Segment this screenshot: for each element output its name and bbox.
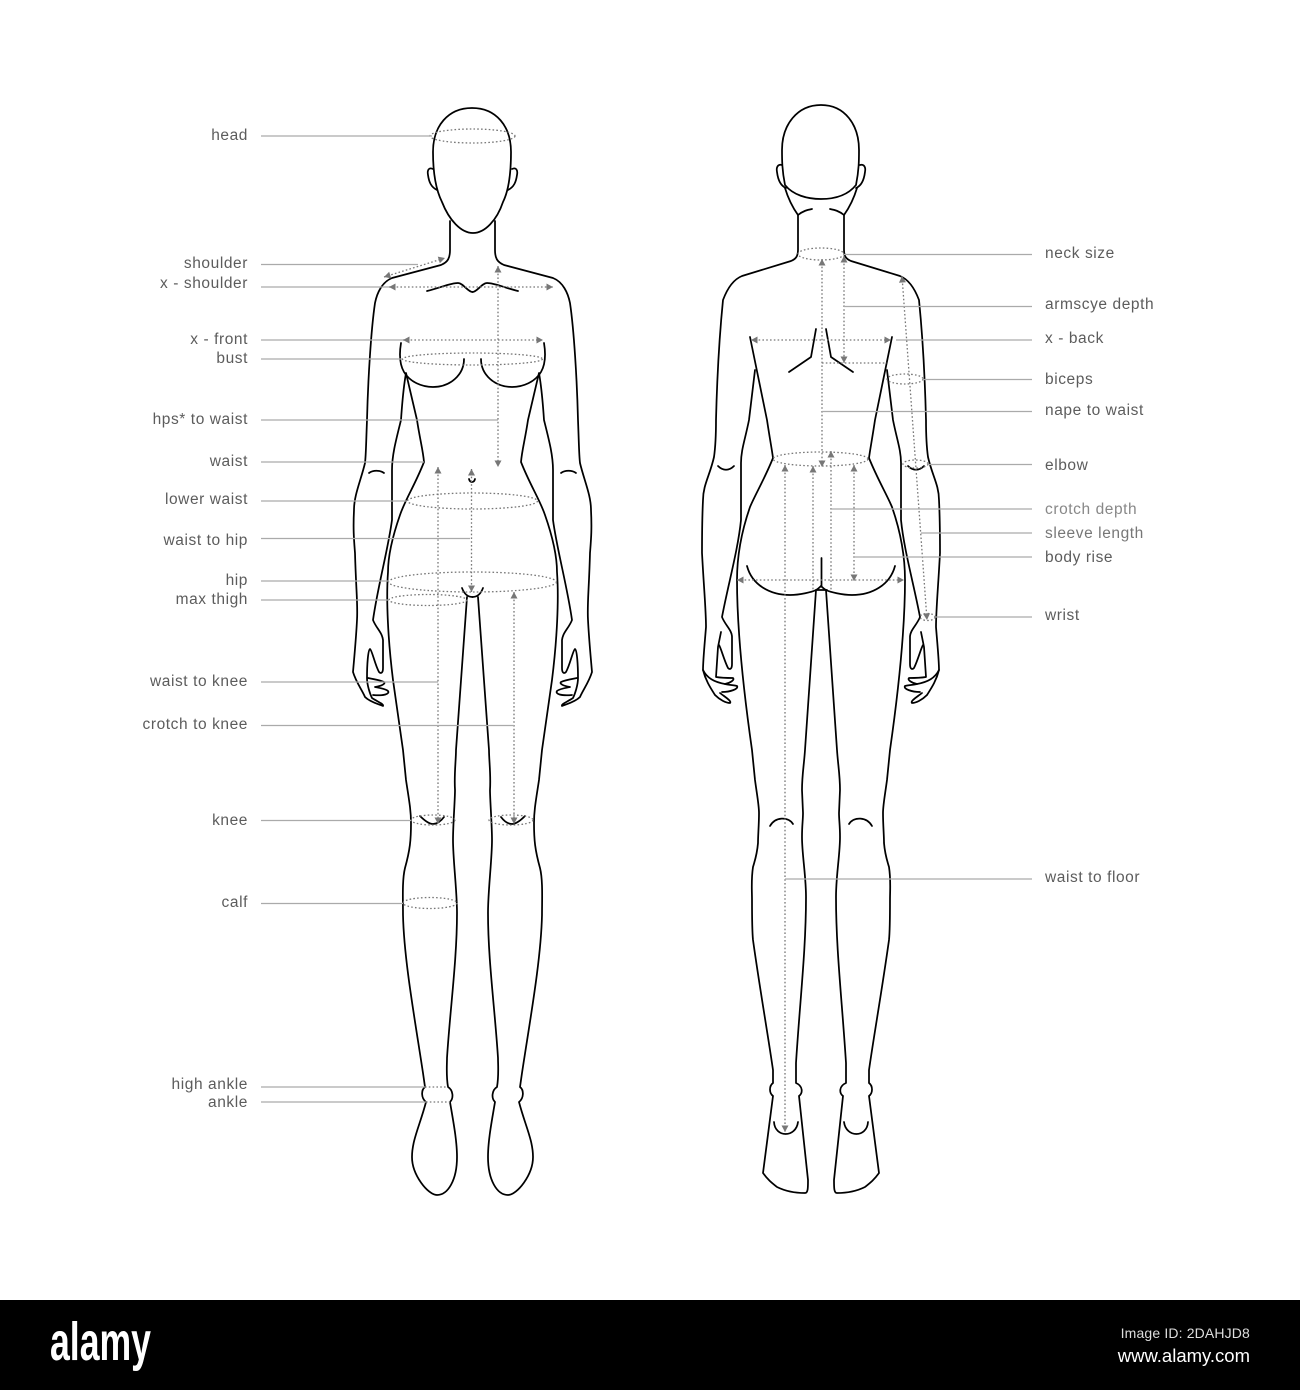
left labels: hps* to waist — [153, 411, 248, 428]
image id: Image ID: 2DAHJD8 — [1121, 1325, 1250, 1341]
bust circumference — [402, 353, 542, 365]
crotch depth arrow — [830, 451, 832, 590]
waist to floor arrow — [784, 465, 786, 1132]
head circumference — [430, 129, 515, 143]
hip width arrow — [737, 579, 904, 581]
right knee circumference — [489, 815, 533, 825]
max thigh circumference — [389, 594, 467, 606]
left labels: waist to hip — [162, 532, 248, 549]
left labels: max thigh — [176, 591, 248, 608]
left labels: x - shoulder — [160, 275, 248, 292]
back right half of body — [821, 165, 940, 1193]
right labels: neck size — [1045, 245, 1115, 262]
right labels: biceps — [1045, 371, 1093, 388]
nape to waist arrow — [821, 259, 823, 467]
website: www.alamy.com — [1117, 1345, 1250, 1366]
right labels: body rise — [1045, 549, 1113, 566]
front left half of body — [353, 168, 472, 1195]
x-shoulder arrow — [389, 286, 553, 288]
body rise arrow — [853, 465, 855, 581]
navel — [469, 479, 475, 482]
right labels: armscye depth — [1045, 296, 1154, 313]
left labels: x - front — [190, 331, 248, 348]
sleeve length arrow — [902, 276, 927, 620]
right labels — [1044, 245, 1154, 886]
left knee circumference — [411, 815, 455, 825]
right labels: wrist — [1044, 607, 1080, 624]
left labels: waist — [209, 453, 248, 470]
hip circumference — [388, 572, 556, 592]
armscye depth arrow — [843, 256, 845, 363]
hps to waist arrow — [497, 266, 499, 467]
x-front arrow — [403, 339, 543, 341]
wrist circumference — [920, 614, 935, 620]
left labels — [143, 127, 248, 1111]
high ankle dotted line — [425, 1086, 448, 1088]
back figure outline — [702, 105, 940, 1193]
waist circumference — [773, 452, 868, 466]
front right half of body — [472, 168, 592, 1195]
left labels: high ankle — [172, 1076, 248, 1093]
calf circumference — [403, 898, 457, 908]
footer bar — [0, 1300, 1300, 1390]
biceps circumference — [887, 374, 923, 384]
waist to hip arrow — [470, 469, 472, 592]
neck circumference — [798, 248, 844, 260]
front figure outline — [353, 108, 592, 1195]
right labels: sleeve length — [1045, 525, 1144, 542]
left labels: crotch to knee — [143, 716, 248, 733]
lower waist circumference — [408, 493, 538, 509]
x-back arrow — [751, 339, 891, 341]
back head — [782, 105, 859, 199]
right labels: waist to floor — [1044, 869, 1140, 886]
crotch to knee arrow — [513, 592, 515, 824]
left labels: knee — [212, 812, 248, 829]
left labels: shoulder — [184, 255, 248, 272]
right labels: nape to waist — [1045, 402, 1144, 419]
left labels: ankle — [208, 1094, 248, 1111]
left labels: lower waist — [165, 491, 248, 508]
back measurement guides — [737, 248, 935, 1132]
left labels: waist to knee — [149, 673, 248, 690]
elbow circumference — [903, 460, 928, 468]
front head — [433, 108, 511, 233]
right labels: elbow — [1045, 457, 1089, 474]
front measurement guides — [384, 129, 556, 1102]
armscye horizontal dotted line — [822, 362, 887, 364]
left labels: hip — [226, 572, 248, 589]
back crotch rise arrow — [812, 466, 814, 590]
left labels: bust — [216, 350, 248, 367]
alamy logo: alamy — [50, 1312, 151, 1372]
right leader lines — [785, 254, 1032, 879]
shoulder arrow — [384, 258, 445, 277]
left labels: head — [211, 127, 248, 144]
waist to knee arrow — [437, 467, 439, 824]
back left half of body — [702, 165, 821, 1193]
ankle dotted line — [426, 1101, 450, 1103]
right labels: x - back — [1045, 330, 1104, 347]
right labels: crotch depth — [1045, 501, 1137, 518]
back crotch centre line — [816, 558, 827, 590]
left labels: calf — [222, 894, 248, 911]
left leader lines — [261, 136, 514, 1102]
